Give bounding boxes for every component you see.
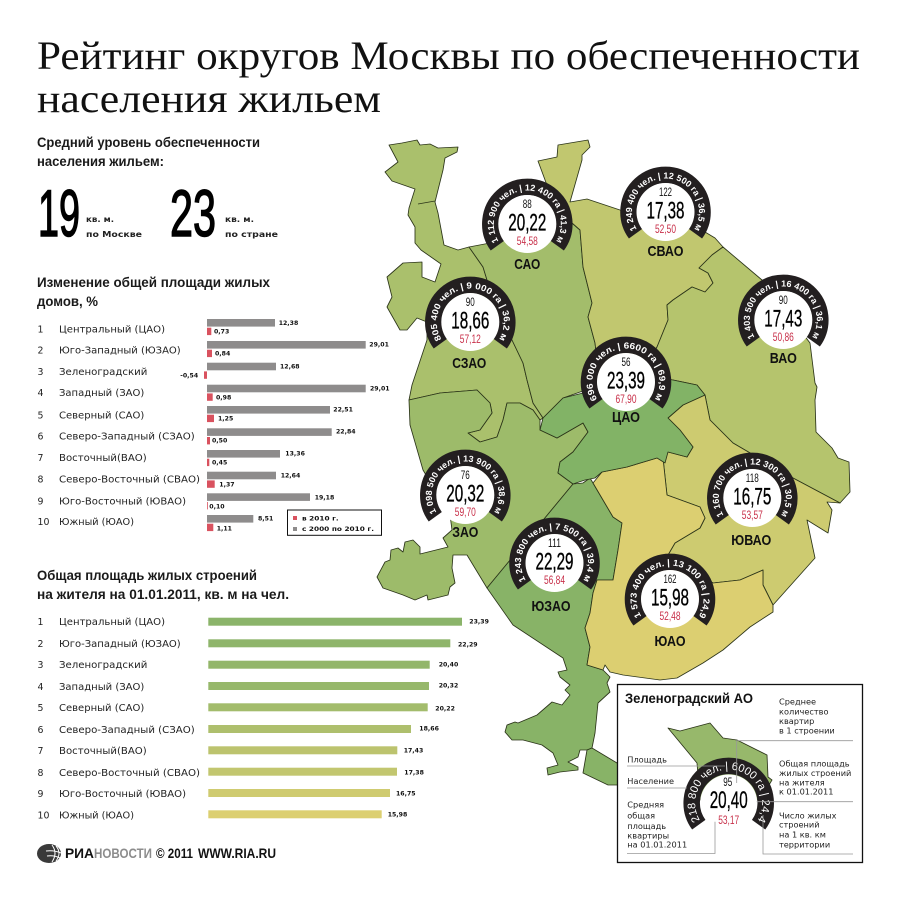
legend: в 2010 г. (302, 516, 339, 522)
bar values: 20,32 (439, 682, 458, 689)
badge: ЮАО: 15,98 (651, 584, 689, 612)
badge: ЗАО: ЗАО (452, 524, 479, 541)
row labels: 9 (38, 496, 44, 508)
callout: buildings per square km (779, 810, 837, 849)
heading: average housing level (37, 134, 260, 169)
row labels (38, 324, 200, 528)
logo: RIA Novosti and copyright: © 2011 (156, 845, 193, 861)
badge: САО: 20,22 (508, 210, 546, 236)
logo: RIA Novosti and copyright (37, 844, 276, 863)
badge: ВАО: 1 403 500 чел. | 16 400 га | 36,1 м (744, 280, 823, 340)
badge: СЗАО: 805 400 чел. | 9 000 га | 36,2 м (430, 282, 510, 342)
badge: ЮВАО (707, 452, 798, 549)
badge: СВАО: 52,50 (655, 222, 676, 236)
badge: ВАО: ВАО (770, 350, 797, 367)
row labels: Северо-Западный (СЗАО) (59, 432, 195, 442)
district: САО (469, 188, 600, 418)
callout: buildings per square km: строений (779, 820, 820, 830)
bar values: 23,39 (469, 618, 489, 625)
badge: САО: 1 112 900 чел. | 12 400 га | 41,3 м (488, 184, 567, 244)
badge: СЗАО: 90 (466, 297, 475, 309)
title: Рейтинг округов Москвы по обеспеченности (37, 33, 860, 78)
row labels: Западный (ЗАО) (59, 682, 144, 693)
row labels: 5 (38, 410, 44, 422)
heading: average housing level: Средний уровень обеспеченности (37, 134, 260, 150)
bar values: 0,50 (212, 437, 228, 444)
bar values: 12,68 (280, 363, 300, 370)
badge: ЗАО: 76 (461, 470, 470, 482)
badge: ЦАО: 56 (622, 357, 630, 369)
badge: САО: САО (514, 256, 541, 273)
stat: 23 sq m in the country: по стране (225, 229, 279, 239)
logo: RIA Novosti and copyright: РИА (65, 845, 94, 861)
bar values: 18,66 (419, 726, 439, 733)
badge: СВАО: СВАО (648, 243, 684, 260)
badge: СЗАО: 18,66 (451, 308, 489, 334)
badge: ЮАО: ЮАО (654, 633, 686, 650)
heading: housing area per resident: на жителя на 01.01.2011, кв. м на чел. (37, 586, 289, 602)
badge: ЮЗАО: 22,29 (536, 548, 574, 576)
title (37, 33, 860, 121)
bar values: -0,54 (180, 372, 199, 379)
bar values: 0,10 (209, 503, 225, 510)
callout: total area per resident: к 01.01.2011 (779, 787, 833, 797)
row labels: 1 (38, 617, 44, 628)
bar values: 17,38 (404, 769, 424, 776)
district: ЮВАО (663, 395, 840, 605)
bars (208, 618, 462, 818)
callout: total area per resident (779, 759, 851, 797)
badge: ЮАО (624, 554, 716, 650)
row labels: Северный (САО) (59, 703, 144, 714)
stat: 19 sq m in Moscow: 19 (38, 176, 80, 250)
icon: globe (37, 844, 61, 863)
bar values: 16,75 (396, 791, 416, 798)
inset heading: Зеленоградский АО (625, 690, 753, 706)
bar chart: change in housing area (38, 319, 390, 533)
inset badge: Zelenograd: 95 (723, 777, 732, 789)
callout: average flat area: на 01.01.2011 (627, 840, 687, 850)
bar values: 15,98 (388, 812, 407, 819)
callout: average flat area: квартиры (627, 830, 669, 840)
row labels: 4 (38, 388, 44, 399)
row labels: Юго-Восточный (ЮВАО) (59, 789, 186, 800)
bar values: 1,25 (218, 416, 233, 423)
legend (288, 510, 382, 535)
district: ВАО (640, 247, 850, 503)
badge: СЗАО: 57,12 (460, 332, 481, 346)
callout: total area per resident: на жителя (779, 778, 825, 788)
row labels: Северо-Восточный (СВАО) (59, 768, 200, 779)
row labels: Восточный(ВАО) (59, 746, 147, 757)
row labels: Южный (ЮАО) (59, 517, 134, 528)
row labels: Зеленоградский (59, 660, 147, 671)
bar values: 0,98 (216, 394, 231, 401)
callout: population: Население (627, 776, 674, 786)
inset badge: Zelenograd: 53,17 (718, 813, 739, 827)
callout: buildings per square km: территории (779, 839, 830, 849)
callout: average flat area: площадь (627, 821, 666, 831)
bar values (180, 320, 390, 533)
row labels: 1 (38, 324, 44, 336)
row labels: 10 (38, 517, 49, 528)
badge: ЦАО: 67,90 (616, 392, 637, 406)
badge: ЮВАО: 16,75 (733, 484, 771, 510)
badge: ЮАО: 162 (664, 574, 676, 586)
row labels: Северный (САО) (59, 410, 144, 422)
bar values: 12,38 (279, 320, 298, 327)
row labels: 8 (38, 474, 44, 486)
row labels: Юго-Западный (ЮЗАО) (59, 639, 181, 650)
inset badge: Zelenograd: 20,40 (710, 787, 748, 814)
title: населения жильем (37, 76, 381, 121)
bar values: 1,37 (219, 482, 235, 489)
bar values: 17,43 (404, 748, 423, 755)
row labels: Центральный (ЦАО) (59, 324, 165, 336)
badge: ЮАО: 1 573 400 чел. | 13 100 га | 24,9 (630, 559, 710, 618)
bar values: 22,84 (336, 428, 356, 435)
map of Moscow districts (377, 140, 850, 785)
heading: housing area per resident: Общая площадь жилых строений (37, 567, 257, 583)
row labels: 2 (38, 639, 44, 650)
badge: ЮЗАО: 111 (548, 538, 561, 550)
stat: 23 sq m in the country: 23 (170, 176, 216, 250)
badge: ЮВАО: 118 (746, 473, 759, 485)
stat: 19 sq m in Moscow: по Москве (86, 229, 142, 239)
heading: housing area per resident (37, 567, 289, 602)
bar values: 0,84 (215, 350, 231, 357)
callout: average flats per building (779, 697, 835, 735)
badge: ЗАО: 59,70 (455, 505, 476, 519)
bar chart: area per resident (38, 617, 489, 822)
badge: СВАО: 17,38 (646, 198, 684, 224)
badge: САО: 88 (523, 199, 532, 211)
row labels: 10 (38, 811, 49, 822)
bar values: 20,22 (435, 705, 455, 712)
legend: с 2000 по 2010 г. (302, 526, 374, 533)
row labels: Западный (ЗАО) (59, 388, 144, 399)
bar values: 22,51 (333, 407, 353, 414)
bar values: 0,45 (212, 459, 227, 466)
panel: Zelenograd inset (616, 684, 864, 864)
red bars: 2010 (204, 328, 215, 531)
logo: RIA Novosti and copyright: НОВОСТИ (94, 845, 152, 861)
bar values: 1,11 (217, 526, 232, 533)
callout: total area per resident: жилых строений (779, 768, 851, 778)
bar values: 29,01 (370, 385, 390, 392)
row labels: Северо-Восточный (СВАО) (59, 474, 200, 486)
badge: СЗАО (425, 276, 516, 372)
badge: ЮЗАО: ЮЗАО (532, 598, 571, 615)
row labels: 5 (38, 703, 44, 714)
row labels: 2 (38, 346, 44, 356)
heading: change in housing area: Изменение общей площади жилых (37, 274, 270, 290)
bar values: 8,51 (258, 516, 273, 523)
inset map: Zelenograd (668, 723, 772, 800)
heading: change in housing area: домов, % (37, 293, 99, 309)
row labels: 8 (38, 768, 44, 779)
badge: ЮВАО: 53,57 (742, 508, 763, 522)
badge: ЗАО: 1 098 500 чел. | 13 900 га | 38,6 м (426, 456, 505, 514)
row labels: Центральный (ЦАО) (59, 617, 165, 628)
callout: average flats per building: количество (779, 706, 828, 716)
stat: 23 sq m in the country: кв. м. (225, 214, 254, 224)
row labels: 6 (38, 432, 44, 442)
row labels: Восточный(ВАО) (59, 453, 147, 464)
row labels: Зеленоградский (59, 367, 147, 378)
badge: ЦАО: 23,39 (607, 368, 645, 394)
badge: ЮВАО: ЮВАО (731, 532, 772, 549)
district: ЦАО (540, 375, 705, 484)
row labels: 4 (38, 682, 44, 693)
badge: СВАО (620, 166, 711, 260)
bar values: 13,36 (285, 450, 305, 457)
callout: average flats per building: квартир (779, 716, 814, 726)
stat: 19 sq m in Moscow: кв. м. (86, 214, 114, 224)
heading: average housing level: населения жильем: (37, 153, 164, 169)
callout: buildings per square km: на 1 кв. км (779, 829, 826, 839)
row labels: 3 (38, 367, 44, 378)
row labels: 6 (38, 725, 44, 736)
row labels (38, 617, 200, 822)
callout: total area per resident: Общая площадь (779, 759, 850, 769)
district: СЗАО (385, 140, 543, 442)
row labels: 7 (38, 453, 44, 464)
bar values: 22,29 (458, 641, 478, 648)
callout: average flats per building: в 1 строении (779, 725, 835, 735)
badge: ЦАО: 696 000 чел. | 6600 га | 69,9 м (586, 342, 666, 401)
bar values: 29,01 (369, 341, 389, 348)
row labels: 7 (38, 746, 44, 757)
callout: average flat area: общая (627, 810, 655, 820)
heading: change in housing area (37, 274, 270, 309)
district: ЮЗАО (487, 478, 622, 775)
row labels: Юго-Западный (ЮЗАО) (59, 346, 181, 356)
callout: buildings per square km: Число жилых (779, 810, 837, 820)
inset badge: Zelenograd: 218 800 чел. | 6000 га | 24,4 (688, 762, 770, 823)
bar values: 20,40 (439, 661, 459, 668)
badge: САО: 54,58 (517, 234, 538, 248)
badge: ЮЗАО: 1 243 800 чел. | 7 500 га | 39,4 м (514, 523, 594, 582)
bar values: 12,64 (281, 472, 301, 479)
callout: average flat area (627, 800, 687, 850)
bar values: 19,18 (315, 494, 334, 501)
row labels: Северо-Западный (СЗАО) (59, 725, 195, 736)
row labels: 3 (38, 660, 44, 671)
badge: САО (482, 178, 573, 273)
badge: ЦАО: ЦАО (612, 409, 640, 426)
callout: average flat area: Средняя (627, 800, 664, 810)
badge: СВАО: 1 249 400 чел. | 12 500 га | 36,5 м (626, 172, 706, 232)
district: ЗАО (377, 390, 588, 600)
grey bars: 2000 to 2010 (207, 319, 366, 523)
callout: average flats per building: Среднее (779, 697, 816, 707)
district: СВАО (538, 140, 723, 385)
badge: ЗАО (420, 450, 511, 541)
district: ЮЗАО southern part (583, 748, 640, 785)
badge: ВАО (738, 274, 829, 367)
row labels: Юго-Восточный (ЮВАО) (59, 496, 186, 508)
callout: area: Площадь (627, 754, 667, 764)
badge: СЗАО: СЗАО (452, 355, 487, 372)
badge: ВАО: 90 (779, 295, 788, 307)
stat: 23 sq m in the country (170, 176, 279, 250)
badge: ЮЗАО: 56,84 (544, 573, 565, 587)
leader lines (627, 741, 853, 854)
row labels: Южный (ЮАО) (59, 811, 134, 822)
logo: RIA Novosti and copyright: WWW.RIA.RU (198, 845, 276, 861)
badge: ВАО: 17,43 (764, 306, 802, 332)
badge: ЮЗАО (509, 518, 600, 615)
district: ЮАО (585, 458, 773, 680)
badge: ЦАО (580, 336, 672, 426)
badge: ЮАО: 52,48 (660, 609, 681, 623)
bar values (388, 618, 489, 819)
badge: ЗАО: 20,32 (446, 480, 484, 508)
badge: СВАО: 122 (659, 187, 672, 199)
row labels: 9 (38, 789, 44, 800)
bar values: 0,73 (214, 328, 229, 335)
badge: ВАО: 50,86 (773, 330, 794, 344)
badge: ЮВАО: 1 160 700 чел. | 12 300 га | 30,5 м (712, 458, 792, 518)
